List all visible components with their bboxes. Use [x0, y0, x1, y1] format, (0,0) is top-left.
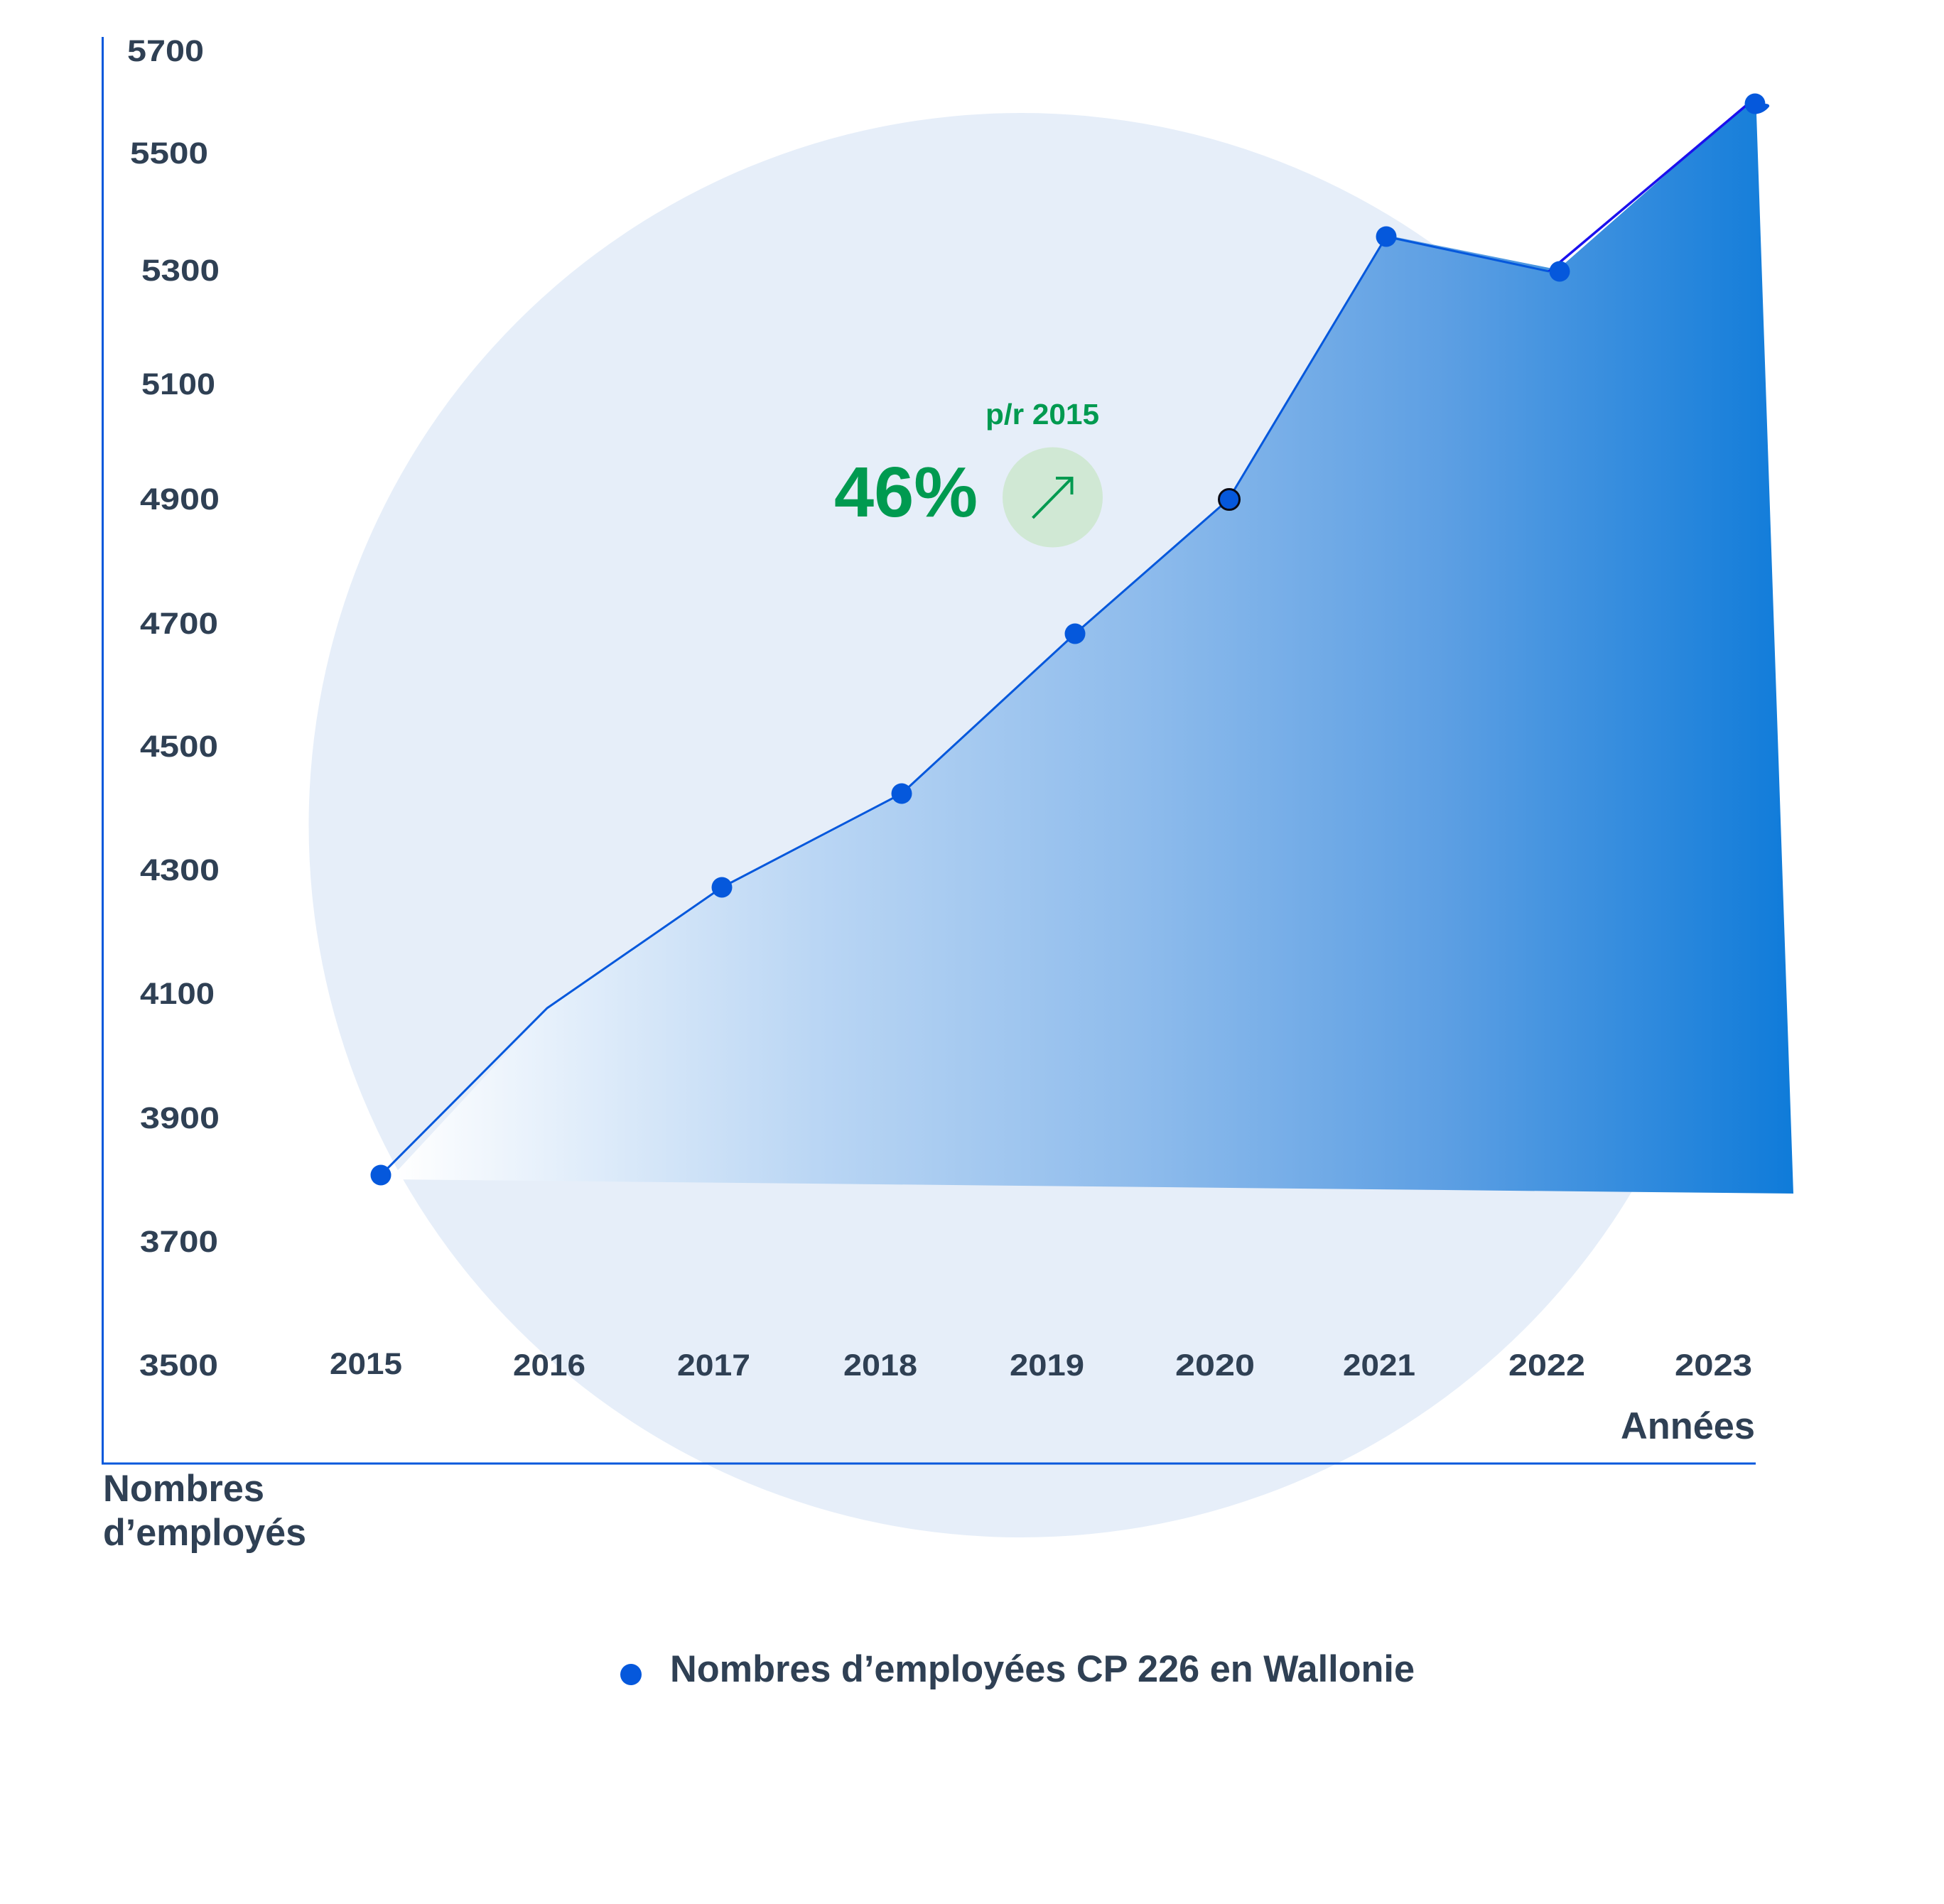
y axis labels: 5300	[141, 254, 220, 288]
x axis labels: 2016	[513, 1348, 585, 1383]
x axis labels: 2018	[843, 1348, 917, 1383]
y axis labels: 5700	[127, 34, 204, 68]
x axis	[102, 1462, 1756, 1465]
y axis labels: 3700	[140, 1225, 218, 1259]
data points	[371, 94, 1769, 1185]
y axis labels: 4900	[140, 482, 220, 516]
x axis title: Années	[1621, 1405, 1755, 1447]
y axis title	[103, 1468, 306, 1554]
y axis labels: 3900	[140, 1101, 220, 1135]
y axis labels: 5500	[130, 136, 208, 171]
y axis labels: 4300	[140, 853, 220, 887]
y axis labels: 4500	[140, 730, 218, 764]
data line	[381, 105, 1746, 1175]
x axis labels: 2020	[1175, 1348, 1255, 1383]
y axis labels: 5100	[141, 367, 215, 401]
y axis labels: 4700	[140, 607, 218, 641]
y axis title: Nombres	[103, 1468, 264, 1510]
gradient area	[389, 104, 1793, 1194]
y axis labels: 4100	[140, 977, 215, 1011]
legend: Nombres d’employées CP 226 en Wallonie	[670, 1648, 1415, 1690]
x axis labels: 2019	[1010, 1348, 1084, 1383]
callout percentage: 46%	[834, 453, 978, 532]
x axis labels	[330, 1347, 1752, 1383]
icon: up arrow in circle	[1003, 448, 1103, 547]
y axis labels: 3500	[139, 1348, 218, 1383]
callout reference year: p/r 2015	[986, 398, 1099, 431]
background circle	[308, 113, 1734, 1537]
x axis labels: 2015	[330, 1347, 402, 1381]
x axis labels: 2022	[1508, 1348, 1585, 1383]
highlighted 2020 point	[1219, 489, 1239, 510]
y axis	[102, 37, 104, 1464]
y axis labels	[127, 34, 220, 1383]
x axis labels: 2017	[677, 1348, 750, 1383]
x axis labels: 2023	[1675, 1348, 1752, 1383]
y axis title: d’employés	[103, 1512, 306, 1554]
x axis labels: 2021	[1343, 1348, 1415, 1383]
